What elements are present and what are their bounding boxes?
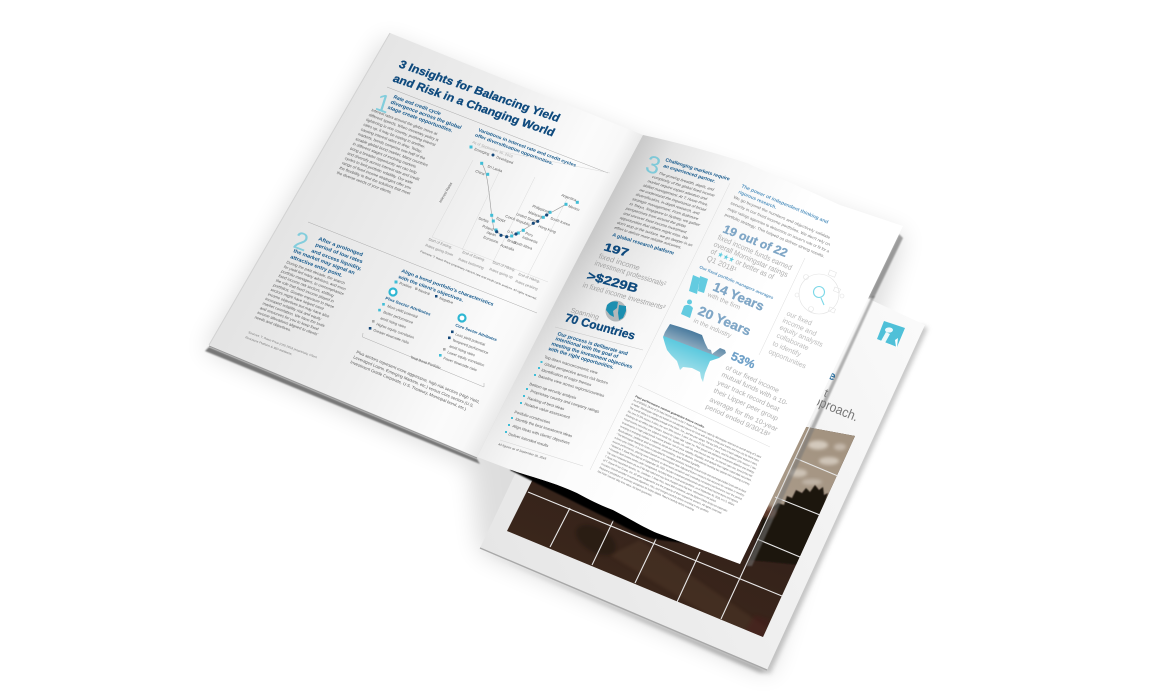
core sector list — [439, 322, 499, 372]
chart x axis labels: End of Easing: — [462, 250, 486, 262]
stat: lipper: 53% — [729, 349, 758, 372]
chart heading — [474, 127, 578, 174]
process list: Global perspective across risk factors — [544, 361, 609, 385]
panel: portfolio characteristics — [350, 268, 499, 412]
research body — [724, 194, 837, 260]
process list: Top-down macroeconomic view — [544, 354, 599, 375]
section 3 body: and uncover fixed income investment — [622, 211, 689, 234]
section 3 body: opportunities that others might miss. We — [619, 216, 690, 240]
stat: lipper: year track record beat — [716, 380, 780, 413]
chart labels: U.K. — [507, 229, 515, 235]
stat: morningstar: overall Morningstar ratings — [712, 240, 790, 279]
analysts caption: equity analysts — [778, 325, 824, 349]
section 1 body: tightening in one country, pushing interest — [365, 117, 438, 147]
process list: Bottom-up security analysis — [529, 381, 577, 400]
section 3 body: complexity of the global fixed income — [651, 175, 717, 198]
chart: interest rate and credit cycles — [420, 127, 610, 301]
chart labels: Poland — [482, 224, 494, 232]
fine print: The views contained herein are as of the date noted and may have changed since that time. Information is not advice. — [606, 451, 718, 503]
fine print: the next 22.5% receive 4 stars, the next 35% receive 3 stars, the next 22.5% receive 2 stars, and the bottom 10% receive 1 star. — [627, 409, 758, 471]
chart legend: Developed — [496, 155, 514, 165]
section 3 body: diversification, in-depth research, and — [635, 192, 701, 215]
chart labels: Mexico — [568, 204, 580, 212]
fine print: a three-year history. It is calculated based on a Morningstar Risk-Adjusted Return measure that accounts for variation in monthly — [614, 436, 746, 498]
soft shadow — [204, 38, 905, 675]
icon: buildings — [689, 275, 708, 294]
stat: managers heading: Our fixed portfolio managers averages — [699, 264, 775, 300]
section 3 heading: an experienced partner. — [662, 163, 716, 185]
fine print: fluctuations, political and economic uncertainty, and limited liquidity. — [618, 428, 702, 469]
chart labels: Eurozone — [483, 235, 499, 244]
section 1 body: markets, bonds comprise one-half of the — [357, 132, 427, 161]
stat: morningstar: 19 out of 22 — [721, 222, 790, 260]
section 1 body: the flexibility to find the solutions that meet — [339, 165, 412, 196]
panel note: Plus sectors represent more aggressive, high-risk sectors (High Yield, — [356, 349, 481, 404]
process list: Ranking of best ideas — [527, 395, 565, 411]
chart labels: Czech Republic — [505, 214, 531, 227]
process heading: meeting the investment objectives — [550, 341, 633, 370]
section 1 heading: stage create opportunities. — [386, 105, 454, 134]
core sector list: Fewer downside risks — [443, 356, 478, 372]
plus sector list: amid rising rates — [380, 316, 407, 329]
plus sector list: Plus Sector Attributes — [385, 295, 432, 317]
icon: analysts magnifier — [795, 270, 844, 314]
research body: major ratings agencies to determine an issuer's role or fit for a — [727, 206, 831, 254]
stat: morningstar: fixed income funds earned — [716, 233, 794, 272]
chart labels: Argentina — [561, 193, 578, 203]
process list: Align ideas with clients' objectives — [512, 423, 571, 445]
chart points — [480, 162, 579, 238]
process heading — [546, 331, 633, 371]
chart legend: Emerging — [474, 147, 490, 156]
chart labels: Serbia — [478, 216, 490, 224]
section 2 body: During the past decade, the search — [285, 260, 346, 285]
chart x axis labels: End of Hiking: — [518, 272, 541, 284]
section 1 body: the diverse needs of your clients. — [336, 170, 393, 195]
panel legend — [394, 280, 454, 305]
analysts caption: income and — [781, 318, 818, 338]
fine print: The overall rating is a weighted average of the three-, five-, and ten-year ratings. The top 10% of funds in each category receive 5 stars, — [629, 406, 759, 467]
cover headline: t — [822, 386, 831, 400]
back cover — [475, 298, 928, 674]
section 2 body: increased volatility risk and equity — [264, 296, 322, 321]
fine print: ¹ The Morningstar Rating for funds is calculated for managed products including mutual funds and exchange-traded funds with at least — [616, 432, 747, 494]
section 3 body: strategic management. From Baltimore — [631, 197, 701, 221]
section 1 body: bring a broader opportunity set can help — [349, 146, 419, 175]
footnote: All figures as of September 30, 2018 — [498, 442, 547, 461]
right page — [477, 135, 903, 564]
process list: Identify the best investment ideas — [515, 416, 573, 438]
section 3 body: market require expert attention and — [646, 179, 709, 201]
fine print: Investing in emerging markets is subject to abrupt and severe price declines. International investing has special risks including currency — [619, 424, 751, 486]
chart labels: Philippines — [532, 204, 550, 214]
section 2 body: the role that fixed income played in — [275, 278, 335, 304]
cover headline: approach. — [805, 390, 861, 424]
chart x axis labels: Rates peaking — [515, 279, 538, 291]
left page — [205, 33, 643, 464]
icon: plus ring — [390, 288, 396, 296]
section 3 body — [609, 169, 734, 252]
process list — [505, 354, 609, 448]
stat: morningstar: Q1 2018¹ — [705, 254, 739, 274]
stat: countries: 70 Countries — [563, 311, 638, 343]
section 1 body — [336, 108, 445, 201]
section 1 heading — [386, 95, 466, 136]
chart labels: Sri Lanka — [487, 164, 504, 174]
stat: years in industry: 20 Years — [696, 303, 753, 339]
chart labels: Brazil — [507, 238, 517, 245]
plus sector list — [369, 295, 432, 345]
core sector list: Lower equity correlation — [447, 350, 485, 367]
stat: lipper — [704, 349, 789, 439]
section 2 body: market correlation. We have the tools — [262, 301, 326, 328]
section 2 heading — [289, 236, 364, 279]
icon: person — [681, 300, 693, 318]
stat: research platform — [593, 232, 675, 289]
section 1 body: Interest rates around the globe move at — [371, 108, 439, 136]
section 2 body: portfolio managers, to overemphasize — [280, 269, 346, 296]
chart heading: Variations in interest rate and credit cycles — [478, 127, 578, 168]
chart x axis labels: Start of Easing: — [428, 237, 453, 250]
panel heading: with the client's objectives. — [396, 274, 464, 304]
section 2 sources: Sources: T. Rowe Price (US) 2018 proprietary, Client — [248, 330, 318, 359]
chart labels: United States — [516, 212, 538, 224]
section 3 body: to Tokyo, Singapore to Sydney, we gather — [628, 202, 702, 227]
fine print: Rankings do not reflect sales charges. Source for Lipper data: Lipper Inc. Peer groups are defined by investment objective and strategy. — [625, 413, 756, 475]
chart labels: Egypt — [496, 216, 506, 223]
stat: assets: >$229B — [585, 269, 640, 295]
section 2 heading: After a prolonged — [317, 236, 364, 258]
fine print: As of 9/30/18, 19 out of 22 fixed income funds in the T. Rowe Price universe rated by Morningstar received an overall rating of 3 stars — [633, 398, 763, 459]
section 1 heading: divergence across the global — [389, 100, 463, 131]
chart labels — [475, 164, 580, 252]
stat: lipper: of our fixed income — [724, 365, 780, 395]
shadow of inner spread on cover — [510, 234, 903, 566]
core sector list: amid rising rates — [449, 344, 476, 357]
section 3 body: we understand the importance of broad — [638, 188, 708, 212]
stat: assets — [581, 269, 667, 312]
fine print: T. Rowe Price Investment Services, Inc., Distributor. T. Rowe Price, Invest With Confidence, and the Bighorn Sheep design are trademarks — [604, 454, 729, 513]
stat: research platform: fixed income — [597, 252, 642, 272]
research heading: rigorous research. — [737, 189, 777, 211]
chart heading: offer diversification opportunities. — [474, 132, 554, 166]
section 1 heading: Rate and credit cycle — [392, 95, 442, 117]
section 3 body: effort to deliver more reliable outcomes. — [613, 225, 683, 250]
fine print: Investors should consider investment objectives, risks, and charges carefully before investing in any portfolio. — [601, 462, 710, 514]
research body: portfolio strategy. This helped us deliver strong results. — [724, 212, 826, 259]
process list: Deliver intended results — [508, 431, 549, 448]
section 2 sources: Reactions Platform & IBD database. — [245, 335, 293, 356]
icon: US map — [663, 324, 726, 382]
process list: Baseline view across regions/countries — [538, 373, 605, 398]
chart x axis labels: Rates going down — [425, 243, 454, 257]
panel legend: Neutral — [418, 288, 431, 296]
fine print: ³ Firmwide fixed income assets under management, including those in multi-asset portfolios, as of September 30, 2018, in U.S. dollars. — [608, 447, 736, 507]
fine print — [597, 394, 766, 531]
section 1 body: rates up, it may be easing in another, — [363, 122, 426, 149]
stat: years with firm: with the firm — [705, 291, 741, 311]
section 2 body: portfolios. Greater exposure to these — [272, 282, 336, 309]
stat: lipper: period ended 9/30/18² — [704, 404, 772, 439]
fine print: ² Based on T. Rowe Price data as of September 30, 2018. Includes investment professionals across all fixed income teams and regions. — [610, 443, 740, 504]
section 2 body: income objectives but may have also — [267, 292, 331, 319]
research body: security in our fixed income portfolios. We don't rely on — [730, 200, 831, 247]
stat: morningstar: of ★★★ or better as of — [709, 247, 776, 282]
core sector list: Tempered performance — [452, 338, 489, 355]
section 1 numeral: 1 — [372, 88, 394, 120]
analysts caption: to identify — [771, 341, 802, 359]
chart x axis labels: Start of Hiking: — [492, 260, 516, 272]
analysts caption: collaborate — [775, 333, 810, 352]
stat: assets: in fixed income investments² — [581, 281, 667, 312]
stat: years with firm: 14 Years — [711, 279, 766, 314]
section 2 body — [254, 260, 351, 342]
stat: research platform: 197 — [602, 242, 630, 260]
process heading: Our process is deliberate and — [556, 331, 629, 357]
process heading: with the right opportunities. — [546, 346, 615, 371]
title: and Risk in a Changing World — [391, 73, 557, 139]
section 2 heading: period of low rates — [314, 242, 364, 265]
chart labels: Peru — [525, 231, 534, 238]
section 3 body: perspectives from around the globe — [625, 206, 688, 229]
bracket label: Total Bond Portfolio — [410, 355, 441, 370]
research body: We go beyond the numbers and objectively validate — [733, 194, 832, 240]
section 2 numeral: 2 — [290, 226, 312, 258]
fine print: Fixed income securities are subject to credit risk, liquidity risk, call risk, and interest rate risk. As interest rates rise, bond prices fall. — [623, 417, 754, 478]
stat: years in industry: in the industry — [692, 318, 733, 340]
fine print: of T. Rowe Price Group, Inc. All other trademarks are the property of their respective owners. All rights reserved. — [602, 458, 723, 515]
fine print: or better. Morningstar ratings are based on risk-adjusted returns for funds with at least a three-year history and may vary by share class. — [631, 402, 760, 463]
stat: lipper: mutual funds with a 10- — [720, 372, 789, 407]
analysts caption: opportunities — [767, 349, 808, 371]
stat: research platform: investment professionals² — [593, 259, 668, 289]
section 1 body: range of fixed income strategies offer you — [341, 160, 412, 190]
plus sector list: Higher equity correlation — [376, 322, 415, 340]
chart labels: Australia — [500, 243, 516, 252]
chart labels: Japan — [486, 230, 497, 237]
stat: research platform: A global research platform — [611, 232, 675, 257]
process list: Proprietary country and company ratings — [530, 388, 600, 414]
chart x axis labels — [425, 237, 541, 291]
fine print: Request a prospectus or summary prospectus for further details. Read it carefully before investing. — [599, 466, 695, 512]
fine print: Past performance cannot guarantee future results. — [635, 394, 706, 429]
section 1 body: cycles to limit portfolio volatility. Our wide — [344, 156, 415, 185]
section 2 body: needs and objectives. — [254, 315, 292, 332]
plus sector list: More yield potential — [387, 304, 418, 319]
icon: logo — [877, 321, 905, 347]
process heading: intentional with the goal of — [554, 336, 619, 360]
analysts caption: our fixed — [785, 311, 813, 327]
stat: countries: Spanning — [569, 307, 600, 321]
chart legend — [470, 146, 514, 165]
stat: morningstar — [705, 222, 794, 282]
research heading: The power of independent thinking and — [740, 183, 829, 225]
panel legend: Negative — [439, 296, 454, 305]
chart x axis labels: Rates bottoming — [458, 257, 484, 270]
section 2 heading: and excess liquidity, — [310, 248, 363, 272]
section 3 heading: Challenging markets require — [664, 157, 731, 182]
chart labels: Hong Kong — [538, 224, 557, 234]
chart labels: South Korea — [550, 216, 571, 227]
plus sector list: Greater downside risks — [373, 328, 410, 345]
section 3 body: don't stop at the surface, we go deeper in an — [616, 220, 694, 247]
section 3 body: skilled management. At T. Rowe Price, — [642, 183, 710, 207]
fine print: Not FDIC insured. May lose value. No bank guarantee. — [597, 469, 653, 498]
section 2 body: sectors might have helped meet — [270, 287, 326, 311]
title: 3 Insights for Balancing Yield — [397, 59, 562, 125]
section 2 body: income allocations aligned to clients' — [256, 310, 319, 337]
chart labels: Indonesia — [522, 235, 539, 245]
section 1 body: different speeds. When monetary policy is — [368, 112, 440, 142]
fine print: Investments in high yield bonds involve greater risk of price volatility, illiquidity, and default than higher-rated debt securities. — [621, 421, 753, 482]
panel note: Leveraged Loans, Emerging Markets, etc.) versus Core sectors (U.S. — [353, 354, 475, 408]
analysts caption — [767, 311, 824, 371]
chart: interest rate and credit cycles: As of September 30, 2018 — [472, 140, 513, 159]
chart axis label: Interest Rates — [438, 181, 453, 204]
process list: Relative value assessment — [524, 401, 572, 420]
section 3 body: The growing breadth, depth, and — [657, 171, 716, 192]
section 1 body: in different stages of evolving markets — [352, 141, 417, 169]
panel note: Investment Grade Corporate, U.S. Treasury, Municipal bond, etc.) — [350, 359, 468, 412]
photo — [507, 420, 855, 637]
icon: globe — [606, 300, 626, 322]
fine print: excess performance, placing more emphasis on downward variations and rewarding consistent performance over the period. — [612, 439, 743, 501]
section 2 heading: the market may signal an — [292, 248, 356, 276]
section 2 body: and resources for you to keep fixed — [259, 305, 320, 331]
core sector list: Less yield potential — [455, 332, 486, 347]
plus sector list: Better performance — [383, 310, 414, 325]
section 2 body: for yield led many advisors, and even — [283, 264, 347, 291]
panel legend: Positive — [399, 281, 412, 289]
chart x axis labels: Rates going up — [489, 267, 513, 280]
core sector list: Core Sector Attributes — [455, 322, 499, 342]
cover headline — [805, 368, 861, 424]
process list: Identification of major themes — [541, 367, 592, 387]
panel heading: Align a bond portfolio's characteristics — [400, 268, 495, 308]
stat: lipper: average for the 10-year — [708, 397, 779, 433]
section 2 heading: attractive entry point. — [289, 254, 344, 279]
cover headline: e — [827, 368, 838, 384]
section 3 numeral: 3 — [642, 150, 664, 181]
icon: core ring — [458, 314, 466, 322]
section 1 body: and diversify across interest rate and credit — [347, 151, 421, 182]
chart labels: South Africa — [513, 240, 534, 251]
chart labels: Malaysia — [528, 210, 544, 219]
chart footnote: Footnote: T. Rowe Price proprietary interest rate and credit cycle analysis. All rights reserved. — [420, 249, 538, 301]
section 1 body: causing interest rates to drop. Today, — [360, 127, 423, 154]
process list: Portfolio construction — [514, 409, 551, 425]
stat: lipper: their Lipper peer group — [712, 388, 779, 423]
section 1 body: sizable global bond market. Many countries — [355, 136, 429, 167]
section 2 body: fixed income risk sectors, shifting — [278, 273, 335, 298]
chart labels: China — [475, 169, 486, 177]
